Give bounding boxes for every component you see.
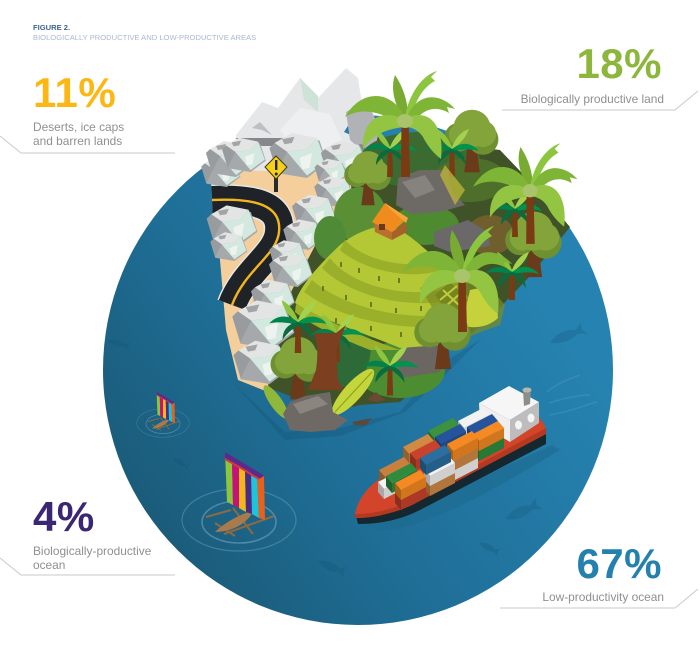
callout: 11 percent — [33, 69, 124, 148]
container ship — [355, 375, 597, 530]
figure title — [33, 23, 256, 42]
warning sign — [265, 156, 287, 192]
hut — [372, 203, 408, 240]
figure title: FIGURE 2. — [33, 23, 70, 32]
bottom boulder — [283, 392, 385, 432]
road — [212, 200, 279, 305]
fern leaves — [260, 165, 465, 422]
callout: 67 percent — [542, 540, 664, 604]
sand beach — [216, 165, 352, 392]
big tree trunk — [308, 325, 346, 390]
island shadow on ocean — [232, 340, 480, 440]
callout: 4 percent — [33, 493, 151, 572]
callout rule: productive land — [502, 91, 698, 110]
rocks along the road — [201, 133, 367, 384]
grey boulders — [396, 170, 490, 378]
callout: 67 percent: 67% — [576, 540, 662, 587]
teal palms — [269, 129, 542, 396]
callout: 11 percent: 11% — [33, 69, 116, 116]
callout rule: productive ocean — [0, 558, 175, 575]
callout: 4 percent: Biologically-productive — [33, 544, 151, 558]
callout rule: deserts — [0, 136, 175, 153]
fish shadows — [108, 322, 587, 577]
callout: 18 percent — [521, 40, 664, 106]
mountains — [235, 68, 380, 175]
callout: 4 percent: 4% — [33, 493, 95, 540]
globe ocean — [103, 115, 613, 625]
callout rule: low-productivity ocean — [500, 589, 698, 608]
island base — [262, 135, 570, 412]
palm trees — [345, 71, 578, 332]
callout: 11 percent: and barren lands — [33, 134, 122, 148]
callout: 11 percent: Deserts, ice caps — [33, 120, 124, 134]
jungle undergrowth — [314, 132, 514, 398]
terraced hill — [295, 226, 505, 350]
callout: 67 percent: Low-productivity ocean — [542, 590, 664, 604]
sailboat large — [182, 452, 296, 551]
callout: 18 percent: Biologically productive land — [521, 92, 664, 106]
small farm plot — [435, 282, 498, 327]
figure title: BIOLOGICALLY PRODUCTIVE AND LOW-PRODUCTIVE AREAS — [33, 32, 256, 42]
trees — [270, 110, 562, 399]
sailboat small — [137, 392, 189, 437]
callout: 4 percent: ocean — [33, 558, 65, 572]
callout: 18 percent: 18% — [576, 40, 662, 87]
